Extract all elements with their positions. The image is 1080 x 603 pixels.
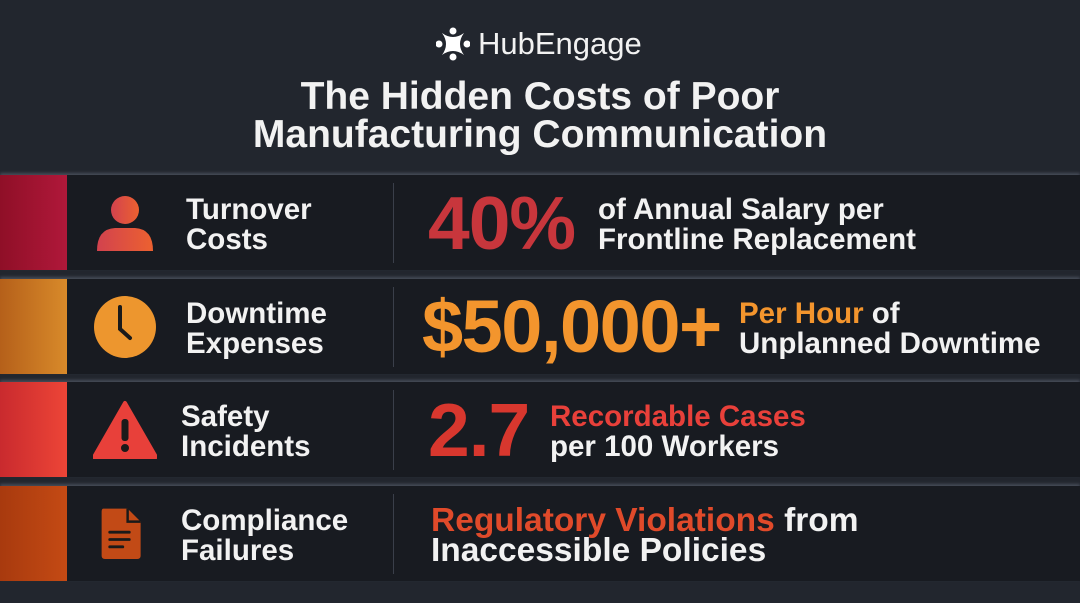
panel: downtime: [0, 279, 1080, 374]
label: Costs: [186, 223, 268, 256]
description: Regulatory Violations from: [431, 502, 859, 539]
label: Incidents: [181, 430, 310, 463]
label: [186, 297, 327, 360]
label: Expenses: [186, 327, 324, 360]
label: Turnover: [186, 193, 312, 226]
description: Unplanned Downtime: [739, 327, 1041, 360]
label: [181, 504, 348, 567]
description: [431, 502, 859, 569]
label: [186, 193, 312, 256]
icon: clock: [94, 296, 156, 358]
description: [550, 400, 806, 463]
icon: warning: [93, 400, 157, 459]
label: Safety: [181, 400, 270, 433]
stat: 2.7: 2.7: [428, 388, 529, 472]
logo: HubEngage: [478, 26, 642, 61]
stat: $50,000+: $50,000+: [422, 285, 721, 368]
description: [598, 193, 916, 256]
panel: turnover: [0, 175, 1080, 270]
title: [253, 75, 827, 156]
label: Downtime: [186, 297, 327, 330]
panel: safety: [0, 382, 1080, 477]
label: Compliance: [181, 504, 348, 537]
description: Inaccessible Policies: [431, 532, 766, 569]
icon: logo mark: [436, 28, 470, 60]
label: [181, 400, 310, 463]
stat: 40%: 40%: [428, 181, 575, 265]
icon: document: [102, 508, 141, 559]
description: per 100 Workers: [550, 430, 779, 463]
description: Frontline Replacement: [598, 223, 916, 256]
icon: person: [97, 196, 153, 251]
description: of Annual Salary per: [598, 193, 884, 226]
title: The Hidden Costs of Poor: [301, 75, 779, 118]
label: Failures: [181, 534, 294, 567]
panel: compliance: [0, 486, 1080, 581]
description: Per Hour of: [739, 297, 900, 330]
title: Manufacturing Communication: [253, 113, 827, 156]
description: [739, 297, 1041, 360]
description: Recordable Cases: [550, 400, 806, 433]
